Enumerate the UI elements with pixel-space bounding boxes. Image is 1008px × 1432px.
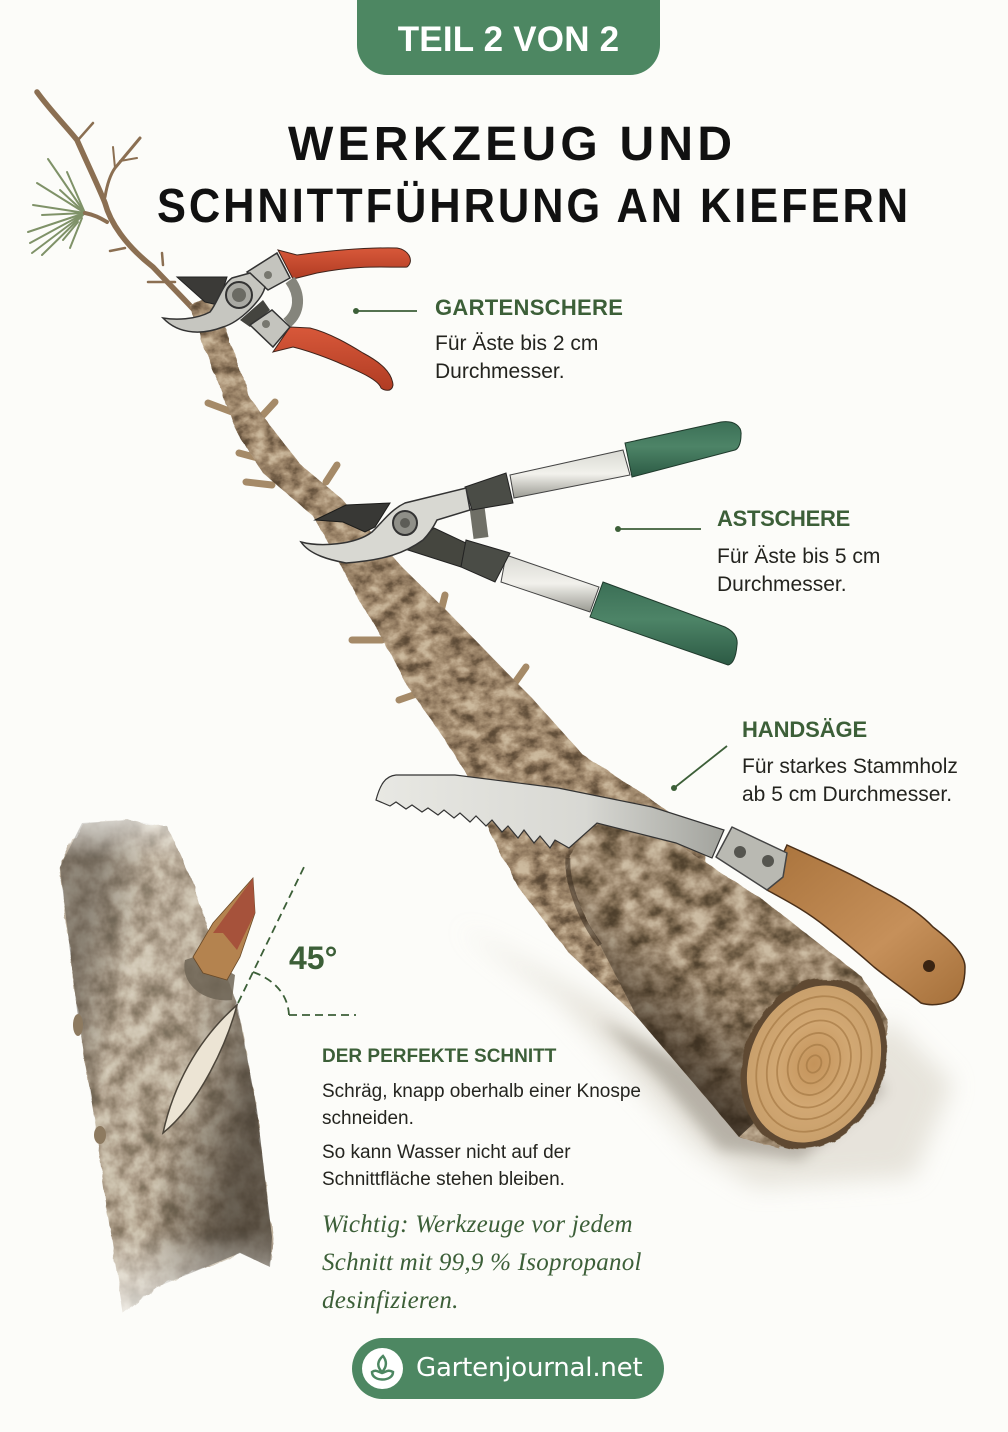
text: perfect cut: Schnittfläche stehen bleiben. [322,1169,565,1190]
label: Handsäge [742,717,958,806]
handwritten note [322,1211,642,1314]
icon: pine twig [28,92,208,325]
handwritten note: Wichtig: Werkzeuge vor jedem [322,1211,633,1238]
text: perfect cut [322,1046,641,1190]
label: Gartenschere: Für Äste bis 2 cm [435,332,598,355]
footer badge [352,1338,664,1399]
text: perfect cut: Schräg, knapp oberhalb einer Knospe [322,1081,641,1102]
label: Gartenschere: GARTENSCHERE [435,295,623,320]
illustration: trunk with cut [55,815,280,1320]
label: Astschere: Durchmesser. [717,573,847,596]
callout lines [353,308,727,791]
title: WERKZEUG UND [288,118,732,171]
angle label: 45° [289,940,337,976]
text: perfect cut: DER PERFEKTE SCHNITT [322,1046,556,1067]
site name: Gartenjournal.net [416,1353,642,1383]
label: Gartenschere [435,295,623,383]
branch [190,296,779,1148]
icon: garden shears [163,248,410,390]
bark stubs [208,402,526,700]
badge: part label [357,0,660,75]
icon: hand saw [376,775,965,1005]
icon: logo [362,1348,403,1389]
icon: lopper [301,422,741,665]
text: perfect cut: So kann Wasser nicht auf der [322,1142,571,1163]
label: Astschere: ASTSCHERE [717,506,850,531]
handwritten note: Schnitt mit 99,9 % Isopropanol [322,1249,642,1276]
badge: part label: TEIL 2 VON 2 [398,20,619,59]
label: Astschere [717,506,880,596]
angle marker [238,865,356,1015]
text: perfect cut: schneiden. [322,1108,414,1129]
handwritten note: desinfizieren. [322,1287,459,1314]
label: Handsäge: Für starkes Stammholz [742,755,958,778]
log [567,823,914,1173]
log cut face [714,955,914,1173]
label: Handsäge: HANDSÄGE [742,717,867,742]
label: Handsäge: ab 5 cm Durchmesser. [742,783,952,806]
log shadow [459,927,953,1187]
title [157,118,908,232]
label: Astschere: Für Äste bis 5 cm [717,545,880,568]
title: SCHNITTFÜHRUNG AN KIEFERN [157,179,908,232]
label: Gartenschere: Durchmesser. [435,360,565,383]
